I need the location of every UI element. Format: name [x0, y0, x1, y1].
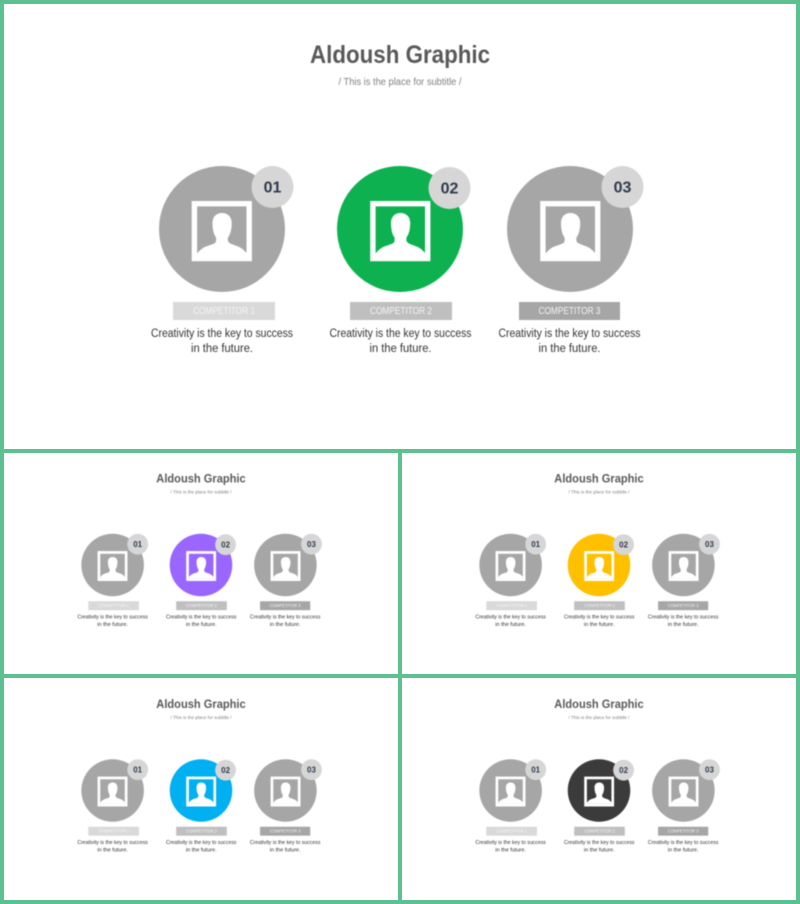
description 3: Creativity is the key to success [498, 328, 641, 340]
competitor 2: COMPETITOR 2 [584, 829, 615, 835]
title: Aldoush Graphic [554, 472, 644, 486]
competitor 2 [166, 534, 237, 628]
competitor 1: 01 [133, 540, 143, 549]
competitor 2: 02 [619, 540, 629, 549]
competitor 3: 03 [307, 540, 316, 549]
number badge 1 [252, 166, 294, 208]
competitor 2: 02 [619, 766, 629, 775]
description 2: Creativity is the key to success [330, 328, 472, 340]
competitor 3: Creativity is the key to success [250, 615, 321, 621]
description 2: in the future. [370, 343, 432, 355]
number badge 2 [428, 167, 470, 209]
competitor 1 [77, 759, 148, 854]
label 1 [173, 302, 275, 320]
competitor 2: in the future. [584, 848, 615, 854]
icon: portrait 1 [194, 204, 249, 258]
subtitle: / This is the place for subtitle / [170, 490, 232, 496]
competitor 1: in the future. [495, 622, 526, 628]
competitor 3: in the future. [668, 848, 699, 854]
competitor 1: Creativity is the key to success [475, 840, 546, 846]
panel: blue variant [77, 697, 322, 854]
title: Aldoush Graphic [310, 41, 490, 69]
competitor 2: in the future. [584, 622, 615, 628]
competitor 2: COMPETITOR 2 [186, 603, 217, 609]
panel: large green variant [151, 41, 644, 355]
competitor 1: COMPETITOR 1 [98, 603, 129, 609]
number badge 3: 03 [614, 180, 632, 196]
number badge 3 [602, 166, 644, 208]
subtitle: / This is the place for subtitle / [338, 77, 462, 88]
competitor 2: Creativity is the key to success [166, 840, 237, 846]
portrait circle 1 [159, 166, 285, 292]
competitor 3: COMPETITOR 3 [270, 829, 301, 835]
icon: portrait 3 [543, 204, 598, 258]
competitor 1 [151, 166, 294, 355]
competitor 1: 01 [531, 540, 541, 549]
competitor 2 [564, 759, 635, 854]
competitor 3: in the future. [270, 622, 301, 628]
competitor 2 [330, 166, 472, 355]
competitor 2: Creativity is the key to success [564, 840, 635, 846]
portrait circle 2 [337, 166, 463, 292]
competitor 1 [475, 534, 546, 628]
competitor 3: 03 [705, 765, 714, 774]
label 2 [350, 302, 452, 320]
competitor 3 [250, 759, 322, 854]
competitor 1: COMPETITOR 1 [496, 603, 527, 609]
competitor 3: Creativity is the key to success [648, 615, 719, 621]
competitor 1: COMPETITOR 1 [98, 829, 129, 835]
competitor 3 [648, 534, 720, 628]
competitor 1: in the future. [495, 848, 526, 854]
competitor 3 [498, 166, 644, 355]
description 1: in the future. [191, 343, 253, 355]
number badge 1: 01 [264, 180, 282, 196]
competitor 2: COMPETITOR 2 [186, 829, 217, 835]
panel: dark variant [475, 697, 720, 854]
label 2: COMPETITOR 2 [370, 306, 432, 317]
label 3: COMPETITOR 3 [538, 306, 601, 317]
competitor 1: Creativity is the key to success [77, 615, 148, 621]
competitor 3: COMPETITOR 3 [270, 603, 301, 609]
competitor 1: 01 [133, 765, 143, 774]
number badge 2: 02 [441, 180, 458, 198]
competitor 3 [648, 759, 720, 854]
competitor 2: in the future. [186, 848, 217, 854]
subtitle: / This is the place for subtitle / [170, 715, 232, 721]
title: Aldoush Graphic [156, 472, 246, 486]
competitor 2: Creativity is the key to success [166, 615, 237, 621]
title: Aldoush Graphic [156, 697, 246, 711]
competitor 1: in the future. [97, 848, 128, 854]
panel: purple variant [77, 472, 322, 628]
competitor 1 [475, 759, 546, 854]
competitor 2 [166, 759, 237, 854]
competitor 1: 01 [531, 765, 541, 774]
subtitle: / This is the place for subtitle / [568, 715, 630, 721]
competitor 1 [77, 534, 148, 628]
competitor 2 [564, 534, 635, 628]
competitor 3: Creativity is the key to success [648, 840, 719, 846]
competitor 3: COMPETITOR 3 [668, 829, 699, 835]
icon: portrait 2 [373, 204, 428, 258]
competitor 3: Creativity is the key to success [250, 840, 321, 846]
competitor 2: 02 [221, 766, 231, 775]
competitor 1: in the future. [97, 622, 128, 628]
competitor 3: in the future. [668, 622, 699, 628]
description 3: in the future. [538, 343, 600, 355]
panel: yellow variant [475, 472, 720, 628]
competitor 2: in the future. [186, 622, 217, 628]
competitor 1: Creativity is the key to success [475, 615, 546, 621]
competitor 1: Creativity is the key to success [77, 840, 148, 846]
subtitle: / This is the place for subtitle / [568, 490, 630, 496]
competitor 3: 03 [705, 540, 714, 549]
competitor 3: COMPETITOR 3 [668, 603, 699, 609]
label 3 [519, 302, 620, 320]
portrait circle 3 [507, 166, 633, 292]
competitor 3: 03 [307, 765, 316, 774]
competitor 3 [250, 534, 322, 628]
competitor 2: 02 [221, 540, 231, 549]
competitor 2: COMPETITOR 2 [584, 603, 615, 609]
title: Aldoush Graphic [554, 697, 644, 711]
competitor 3: in the future. [270, 848, 301, 854]
competitor 2: Creativity is the key to success [564, 615, 635, 621]
competitor 1: COMPETITOR 1 [496, 829, 527, 835]
label 1: COMPETITOR 1 [193, 306, 255, 317]
description 1: Creativity is the key to success [151, 328, 293, 340]
